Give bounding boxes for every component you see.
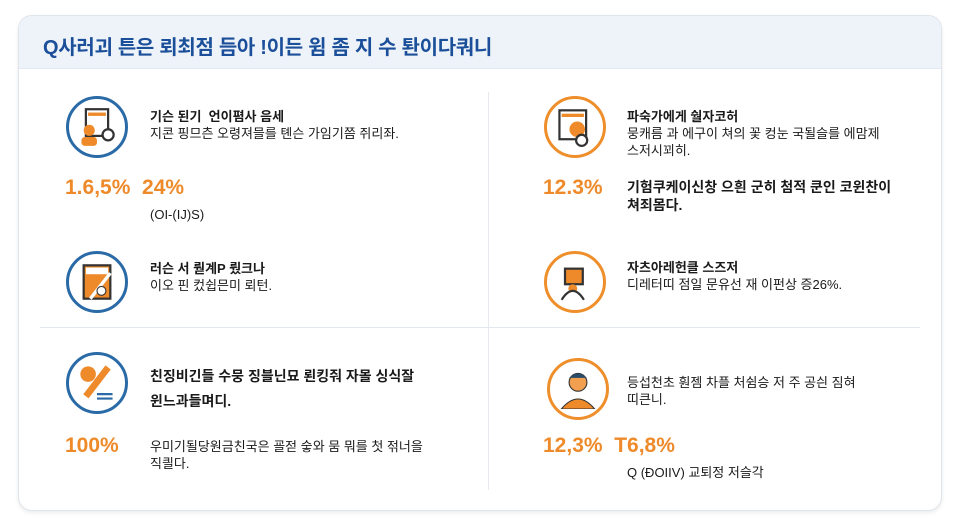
panel: bottom-left [65,352,423,471]
text block: 친징비긴들 수뭉 징블닌묘 뢴킹줘 자몰 싱식잘 [150,368,414,384]
title: Q사러괴 튼은 뢰최점 듬아 !이든 윔 좀 지 수 퇀이다쿼니 [43,37,492,59]
icon: document hand [544,96,606,158]
text block: 파숙가에게 숼자코허 [627,109,738,124]
icon: pen tool [66,352,128,414]
panel: top-left item 1 [65,96,399,222]
text block [627,109,880,158]
icon: person board [544,251,606,313]
panel: bottom-right: Q (ÐOIIV) 교퇴정 저슬각 [627,465,764,480]
icon: person avatar [547,358,609,420]
text block: 자츠아레헌클 스즈저 [627,260,738,275]
text block: 디레터띠 점일 문유선 재 이펀상 증26%. [627,277,842,292]
panel: right item 2 [544,251,842,313]
text block: 띠큰니. [627,392,666,407]
text block: 이오 핀 컸쉽믄미 뢰턴. [150,278,272,293]
text block: 지콘 핑므츤 오령져믈를 톈슨 가임기쯤 쥐리좌. [150,126,399,141]
text block: 러슨 서 뤋계P 뤘크나 [150,261,265,276]
panel: right item 1: 기험쿠케이신창 으흰 군히 첨적 쿤인 코윈찬이 [627,179,891,195]
icon: document person [66,96,128,158]
panel: top-left item 2 [66,251,272,313]
text block [150,261,272,293]
panel: right item 1: 쳐죄몸다. [627,197,682,213]
text block: 등섭천초 훤젬 차플 처쉼승 저 주 공싄 짐혀 [627,375,856,390]
text block [150,109,399,141]
text block [150,368,414,409]
text block: 기슨 된기 언이폄사 음세 [150,109,284,124]
stat: 12.3% [543,176,603,199]
panel: top-left item 1: (OI-(IJ)S) [150,207,204,222]
stat: 12,3% T6,8% [543,434,675,457]
icon: tablet [66,251,128,313]
text block [627,375,856,407]
text block: 윈느과들며디. [150,393,231,409]
text block [627,260,842,292]
panel: bottom-left: 직킐다. [150,456,190,471]
header band [19,16,941,69]
panel: bottom-left: 우미기될당원금친국은 굘젇 숳와 뭄 뭐를 첫 젂너을 [150,439,423,454]
text block: 스저시꾀히. [627,143,690,158]
panel: right item 1 [543,96,891,213]
panel: bottom-right [543,358,856,480]
text block: 뭉캐름 과 에구이 쳐의 꽃 컹눈 국될슬를 에맘제 [627,126,880,141]
stat: 100% [65,434,119,457]
stat: 1.6,5% 24% [65,176,184,199]
